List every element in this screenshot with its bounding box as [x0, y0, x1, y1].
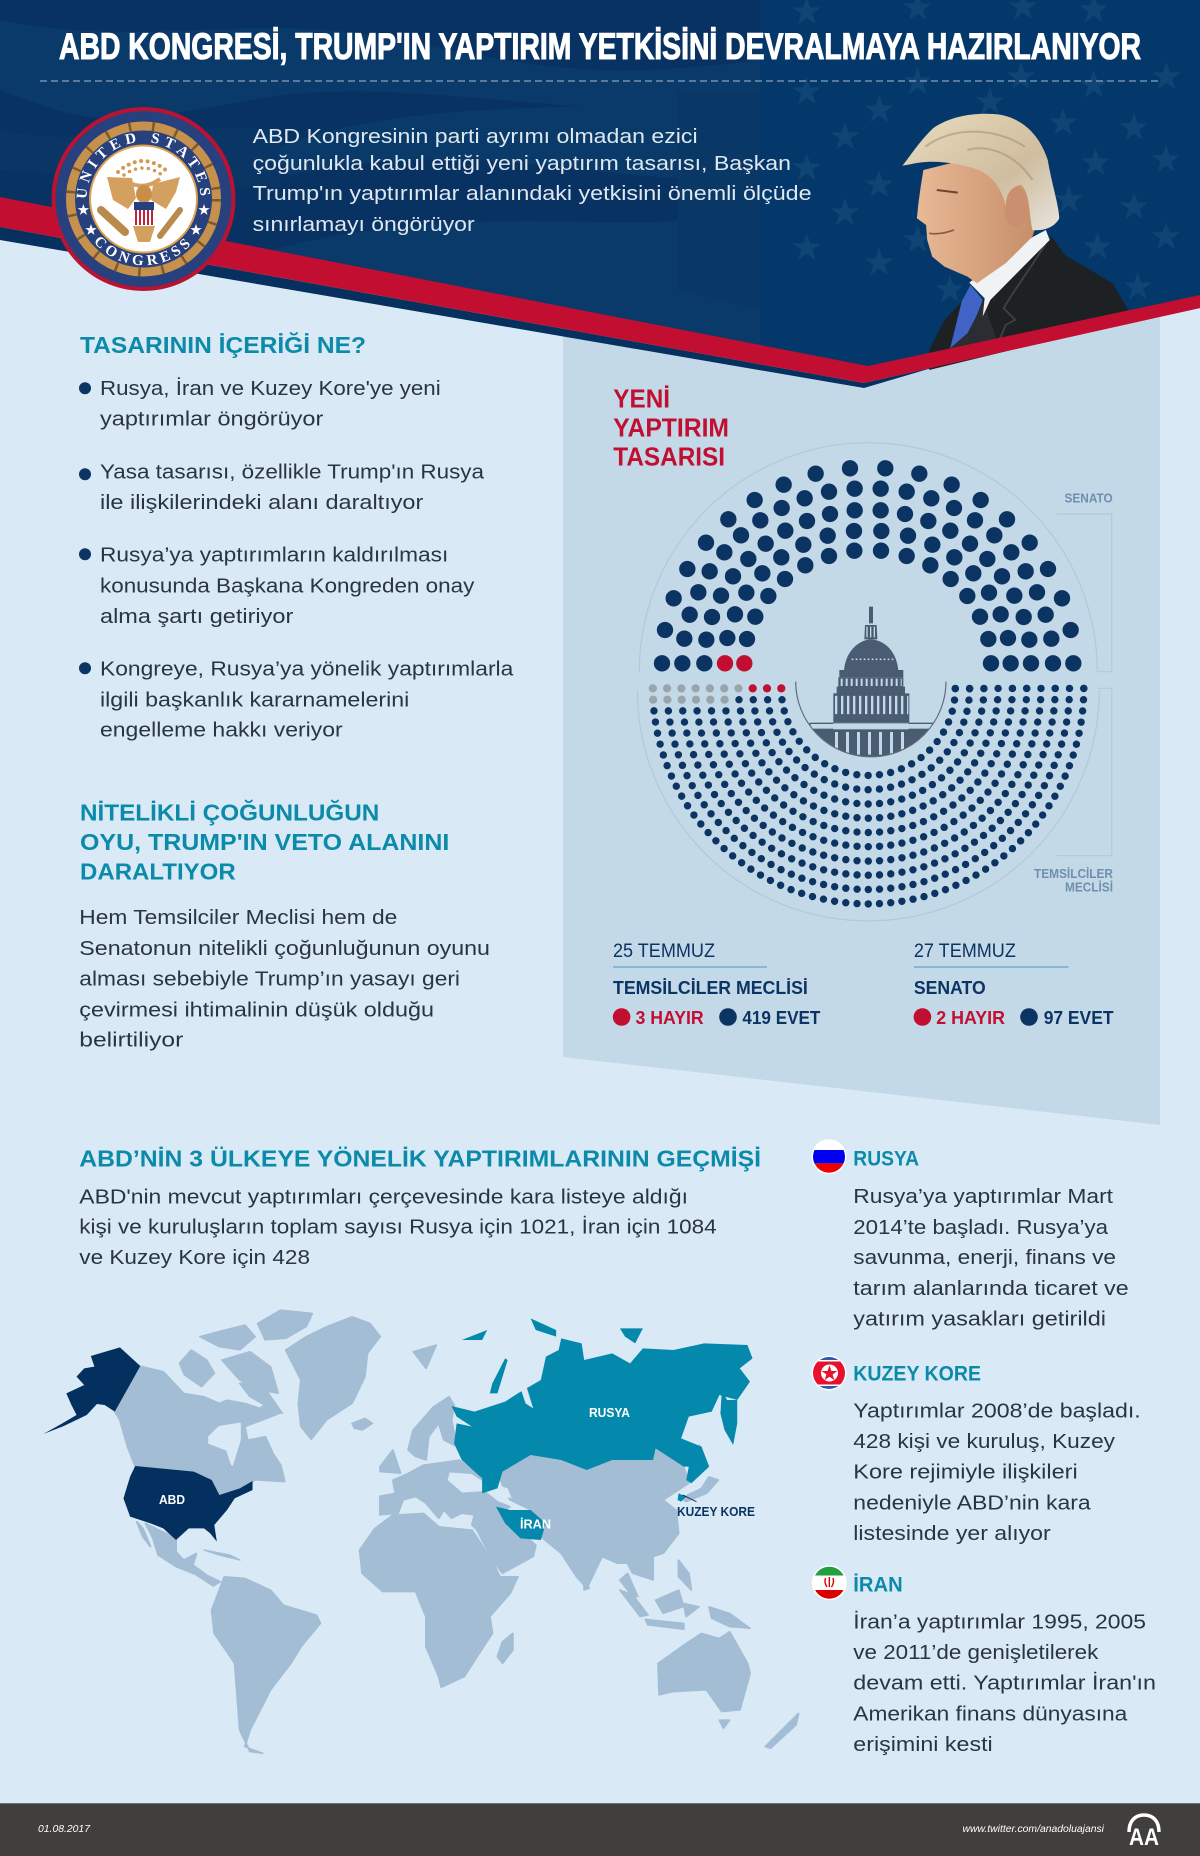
vote results: senate: 27 TEMMUZ	[914, 941, 1016, 962]
label: house	[1034, 866, 1113, 895]
section: Iran: Amerikan finans dünyasına	[853, 1702, 1128, 1725]
header background	[0, 0, 1200, 380]
chart: senate seats	[654, 460, 1081, 671]
red ribbon	[0, 197, 1200, 388]
vote results: house: 25 TEMMUZ	[613, 941, 715, 962]
text block: veto: belirtiliyor	[79, 1029, 184, 1052]
icon: Capitol building	[796, 607, 946, 757]
bullet list: Yasa tasarısı, özellikle Trump'ın Rusya	[100, 460, 485, 483]
heading: new sanctions bill: YAPTIRIM	[613, 413, 729, 443]
section: Iran	[853, 1574, 1156, 1756]
bullet list	[79, 377, 514, 742]
bullet list: ilgili başkanlık kararnamelerini	[100, 688, 409, 711]
world map	[43, 1310, 798, 1753]
section: Iran: devam etti. Yaptırımlar İran'ın	[853, 1672, 1156, 1695]
section: North Korea	[853, 1363, 1141, 1545]
section: North Korea: nedeniyle ABD’nin kara	[853, 1491, 1091, 1514]
vote results: senate: 2 HAYIR	[936, 1008, 1005, 1028]
Russia	[452, 1318, 753, 1493]
label: house: TEMSİLCİLER	[1034, 866, 1113, 881]
map labels: İRAN	[520, 1517, 551, 1532]
icon: US Congress seal: UNITED STATES	[76, 133, 210, 198]
section: North Korea: Yaptırımlar 2008’de başladı.	[853, 1399, 1141, 1422]
heading: new sanctions bill: YENİ	[613, 383, 670, 413]
text block: blacklist totals: kişi ve kuruluşların toplam sayısı Rusya için 1021, İran için 1084	[79, 1215, 717, 1238]
footer	[0, 1803, 1200, 1856]
icon: US Congress seal: CONGRESS	[96, 237, 190, 266]
heading: qualified majority: OYU, TRUMP'IN VETO ALANINI	[80, 829, 449, 855]
star pattern	[792, 0, 1181, 302]
intro text: ABD Kongresinin parti ayrımı olmadan ezici	[253, 126, 698, 148]
icon: North Korean flag	[812, 1356, 846, 1390]
section: Russia: savunma, enerji, finans ve	[853, 1246, 1116, 1269]
section: Russia: tarım alanlarında ticaret ve	[853, 1277, 1129, 1300]
text block: veto: çevirmesi ihtimalinin düşük olduğu	[79, 998, 434, 1021]
vote results: house: TEMSİLCİLER MECLİSİ	[613, 978, 808, 998]
section: North Korea: listesinde yer alıyor	[853, 1522, 1051, 1545]
heading: qualified majority: NİTELİKLİ ÇOĞUNLUĞUN	[80, 799, 379, 826]
USA	[43, 1347, 253, 1542]
text block: blacklist totals: ve Kuzey Kore için 428	[79, 1246, 310, 1269]
vote results: senate: SENATO	[914, 978, 986, 998]
map labels: ABD	[159, 1492, 185, 1507]
North Korea	[678, 1493, 686, 1502]
section: Iran: İran’a yaptırımlar 1995, 2005	[853, 1610, 1146, 1633]
text block: veto: alması sebebiyle Trump’ın yasayı geri	[79, 968, 460, 991]
map labels	[159, 1405, 755, 1532]
text block: blacklist totals	[79, 1185, 717, 1269]
text block: blacklist totals: ABD'nin mevcut yaptırımları çerçevesinde kara listeye aldığı	[79, 1185, 688, 1208]
panel: new sanctions bill background	[563, 300, 1160, 1125]
icon: Russian flag	[810, 1139, 848, 1175]
text block: veto: Hem Temsilciler Meclisi hem de	[79, 906, 397, 929]
footer: www.twitter.com/anadoluajansi	[962, 1823, 1105, 1835]
text block: veto: Senatonun nitelikli çoğunluğunun oyunu	[79, 937, 490, 960]
label: house: MECLİSİ	[1065, 880, 1113, 895]
section: Iran: erişimini kesti	[853, 1733, 993, 1756]
chart outline rings and brackets	[637, 443, 1112, 921]
section: Russia	[853, 1148, 1129, 1331]
footer: AA	[1129, 1824, 1159, 1851]
bullet list: Kongreye, Rusya’ya yönelik yaptırımlarla	[100, 658, 514, 681]
icon: US Congress seal	[52, 107, 236, 291]
intro text: sınırlamayı öngörüyor	[253, 214, 475, 236]
section: Russia: Rusya’ya yaptırımlar Mart	[853, 1185, 1113, 1208]
land masses	[115, 1310, 798, 1753]
intro text: Trump'ın yaptırımlar alanındaki yetkisini önemli ölçüde	[253, 183, 812, 205]
chart: house of representatives seats	[653, 688, 1084, 904]
intro text	[253, 126, 812, 236]
photo: Donald Trump	[902, 114, 1130, 370]
label: senate: SENATO	[1064, 492, 1113, 506]
section: Iran: ve 2011’de genişletilerek	[853, 1641, 1099, 1664]
absent and no votes in the house	[649, 684, 785, 704]
section: Russia: yatırım yasakları getirildi	[853, 1308, 1106, 1331]
vote results: senate	[914, 941, 1114, 1028]
bullet list: Rusya’ya yaptırımların kaldırılması	[100, 544, 448, 567]
bullet list: ile ilişkilerindeki alanı daraltıyor	[100, 491, 423, 514]
vote results: house	[613, 941, 820, 1028]
bullet list: konusunda Başkana Kongreden onay	[100, 574, 475, 597]
heading: what is in the bill: TASARININ İÇERİĞİ NE?	[80, 331, 366, 358]
map labels: KUZEY KORE	[677, 1504, 755, 1519]
heading: history of sanctions: ABD’NİN 3 ÜLKEYE YÖNELİK YAPTIRIMLARININ GEÇMİŞİ	[79, 1146, 761, 1172]
map labels: RUSYA	[589, 1405, 631, 1420]
heading: new sanctions bill: TASARISI	[613, 442, 725, 472]
section: Russia: RUSYA	[853, 1148, 919, 1171]
section: Iran: İRAN	[853, 1574, 903, 1597]
footer: 01.08.2017	[38, 1823, 91, 1835]
bullet list: engelleme hakkı veriyor	[100, 719, 343, 742]
bullet list: Rusya, İran ve Kuzey Kore'ye yeni	[100, 377, 441, 400]
bullet list: alma şartı getiriyor	[100, 605, 293, 628]
heading: qualified majority	[80, 799, 449, 884]
inland waters	[503, 1380, 533, 1498]
text block: veto	[79, 906, 490, 1052]
heading: new sanctions bill	[613, 383, 729, 472]
intro text: çoğunlukla kabul ettiği yeni yaptırım tasarısı, Başkan	[253, 153, 791, 175]
bullet list: yaptırımlar öngörüyor	[100, 408, 323, 431]
vote results: house: 3 HAYIR	[636, 1008, 704, 1028]
vote results: senate: 97 EVET	[1044, 1008, 1114, 1028]
section: North Korea: 428 kişi ve kuruluş, Kuzey	[853, 1430, 1116, 1453]
icon: Iranian flag	[812, 1565, 847, 1600]
heading: qualified majority: DARALTIYOR	[80, 858, 236, 884]
Iran	[496, 1507, 546, 1540]
section: Russia: 2014’te başladı. Rusya’ya	[853, 1216, 1109, 1239]
section: North Korea: Kore rejimiyle ilişkileri	[853, 1461, 1078, 1484]
section: North Korea: KUZEY KORE	[853, 1363, 981, 1386]
vote results: house: 419 EVET	[742, 1008, 820, 1028]
house seats at right end of rows	[952, 685, 1088, 692]
